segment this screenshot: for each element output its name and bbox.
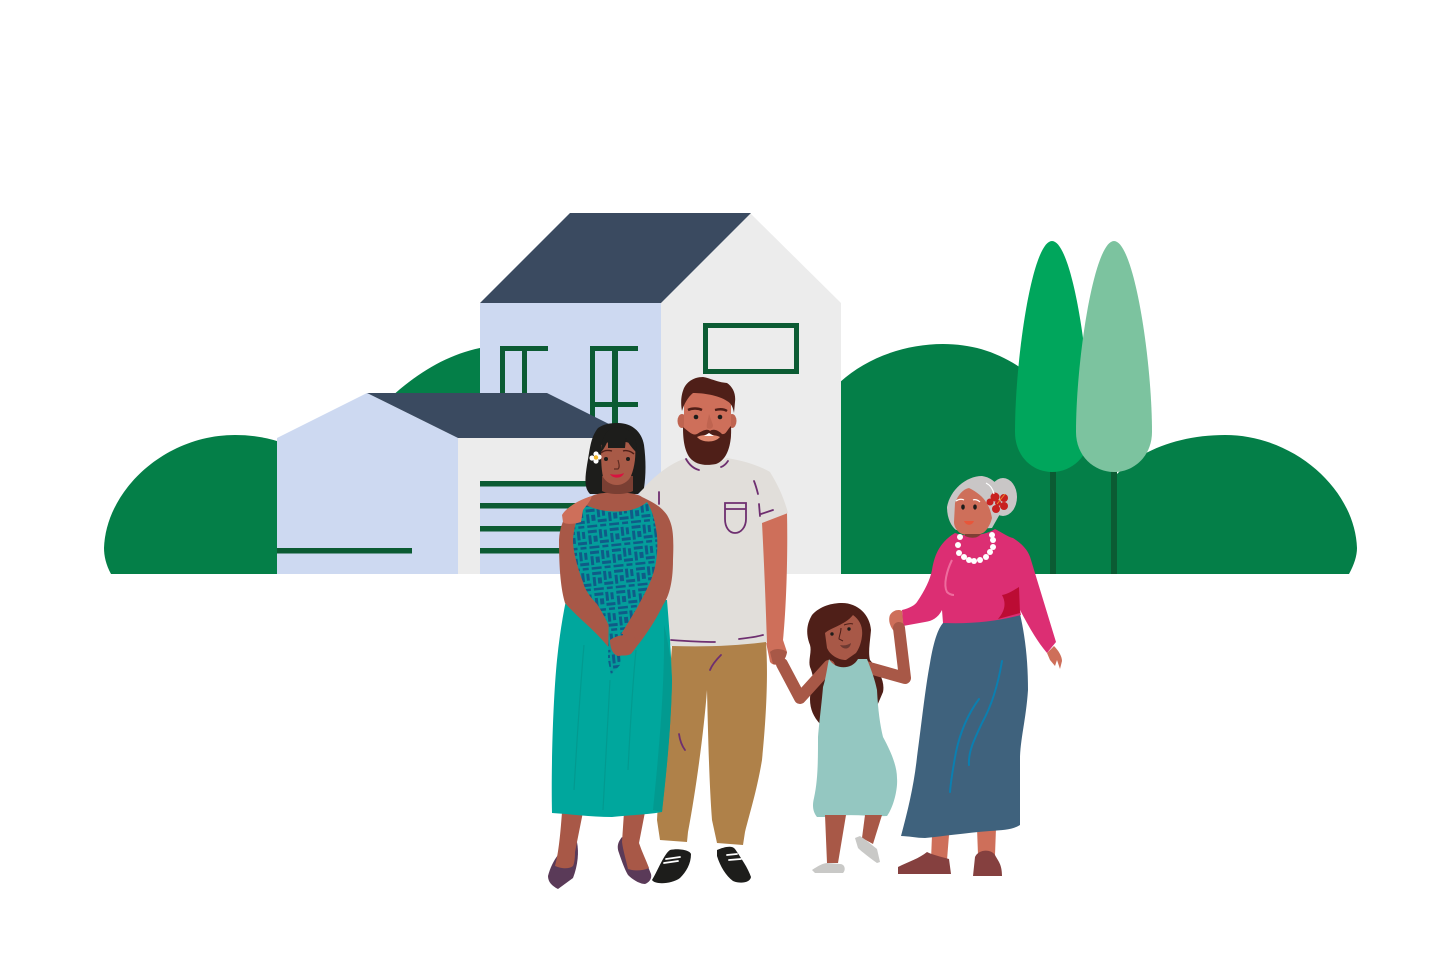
man: beard bbox=[683, 426, 731, 465]
woman: clasped hands bbox=[610, 635, 636, 656]
woman: legs bbox=[555, 812, 649, 870]
window: right upstairs bbox=[590, 346, 638, 430]
girl: long hair bbox=[807, 603, 883, 724]
grandmother: hair bun bbox=[989, 478, 1017, 516]
garage: roof bbox=[367, 393, 637, 438]
girl: mouth bbox=[840, 643, 851, 649]
person: man bbox=[640, 377, 788, 883]
man: hand on shoulder bbox=[562, 496, 592, 524]
woman: skirt bbox=[552, 600, 672, 817]
garage: door bbox=[480, 481, 638, 574]
grandmother: skirt folds bbox=[950, 661, 1002, 792]
man: hair bbox=[681, 377, 735, 413]
woman: right shoe bbox=[618, 837, 651, 884]
man: trouser creases bbox=[679, 655, 721, 750]
main house bbox=[480, 213, 841, 574]
woman: nose bbox=[614, 460, 619, 469]
woman: neck shadow bbox=[602, 476, 633, 494]
person: woman bbox=[548, 423, 673, 889]
woman: left shoe bbox=[548, 842, 578, 889]
main house: side wall bbox=[661, 213, 841, 574]
woman: flower bbox=[589, 451, 602, 464]
man: shoelaces bbox=[664, 854, 741, 863]
man: right arm bbox=[762, 512, 787, 665]
girl: legs bbox=[825, 815, 882, 863]
man: nose bbox=[707, 414, 713, 429]
person: girl bbox=[782, 603, 905, 873]
grandmother: pearl necklace bbox=[955, 532, 996, 564]
garage bbox=[277, 393, 638, 574]
man: left shoe bbox=[652, 849, 691, 883]
man: ears bbox=[678, 414, 736, 428]
window: left upstairs bbox=[500, 346, 548, 395]
grandmother: skirt bbox=[901, 614, 1028, 838]
tree crown: light green bbox=[1076, 241, 1152, 472]
grandmother: neck shadow bbox=[965, 534, 981, 538]
window: side wall bbox=[706, 326, 796, 372]
hill: centre right bbox=[838, 344, 1357, 574]
person: grandmother bbox=[889, 476, 1062, 876]
woman: patterned top bbox=[573, 502, 657, 636]
grandmother: face bbox=[954, 488, 992, 535]
grandmother: sweater bbox=[902, 529, 1056, 653]
tree trunk: light tree bbox=[1111, 465, 1117, 574]
girl: eyes and brow bbox=[830, 624, 853, 641]
man: right shoe bbox=[717, 847, 751, 883]
girl: face bbox=[825, 615, 862, 660]
grandmother: left hand bbox=[889, 610, 904, 632]
man: hand bbox=[770, 649, 787, 664]
grandmother: legs bbox=[931, 828, 996, 860]
tree trunk: dark tree bbox=[1050, 465, 1056, 574]
man: teeth bbox=[704, 433, 714, 436]
main house: roof bbox=[480, 213, 751, 303]
grandmother: flower bbox=[986, 492, 1008, 513]
garage: front gable bbox=[277, 393, 458, 574]
woman: skirt pleats bbox=[574, 645, 636, 810]
grandmother: hair bbox=[947, 476, 1005, 530]
tree crown: dark green bbox=[1015, 241, 1090, 472]
trees bbox=[1015, 241, 1152, 574]
man: trousers bbox=[657, 642, 767, 845]
hills bbox=[104, 344, 1357, 574]
grandmother: hair highlight bbox=[986, 483, 994, 494]
woman: mouth bbox=[610, 473, 624, 478]
woman: fringe bbox=[601, 427, 636, 452]
man: hand holding girl's hand bbox=[770, 649, 787, 664]
main house: front wall bbox=[480, 303, 661, 574]
woman: patterned sash bbox=[608, 605, 623, 675]
grandmother: right hand bbox=[1047, 646, 1062, 669]
grandmother: eyes and brows bbox=[956, 499, 980, 510]
woman: eyes and brows bbox=[601, 450, 634, 461]
grandmother: mouth bbox=[964, 521, 974, 525]
garage: gable stripe bbox=[277, 548, 412, 554]
woman: hair back bbox=[585, 423, 646, 494]
man: eyes and brows bbox=[688, 408, 727, 419]
girl: dress bbox=[813, 659, 897, 817]
woman: face bbox=[601, 441, 635, 485]
man: face bbox=[684, 390, 731, 462]
grandmother: shoes bbox=[898, 851, 1002, 876]
man: t-shirt bbox=[640, 458, 788, 647]
garage: side wall bbox=[458, 438, 638, 574]
girl: shoes bbox=[812, 836, 880, 873]
grandmother: sweater crease bbox=[945, 560, 954, 595]
grandmother: sweater shadow bbox=[998, 587, 1020, 619]
hill: behind house bbox=[390, 347, 485, 398]
man: t-shirt stitching bbox=[659, 459, 773, 642]
garage: door slats bbox=[480, 481, 638, 554]
woman: torso and arms bbox=[559, 492, 673, 656]
woman: skirt fold bbox=[653, 625, 672, 812]
hill: far left bbox=[104, 435, 280, 574]
man: mouth bbox=[697, 435, 720, 442]
girl: arms bbox=[782, 628, 905, 698]
